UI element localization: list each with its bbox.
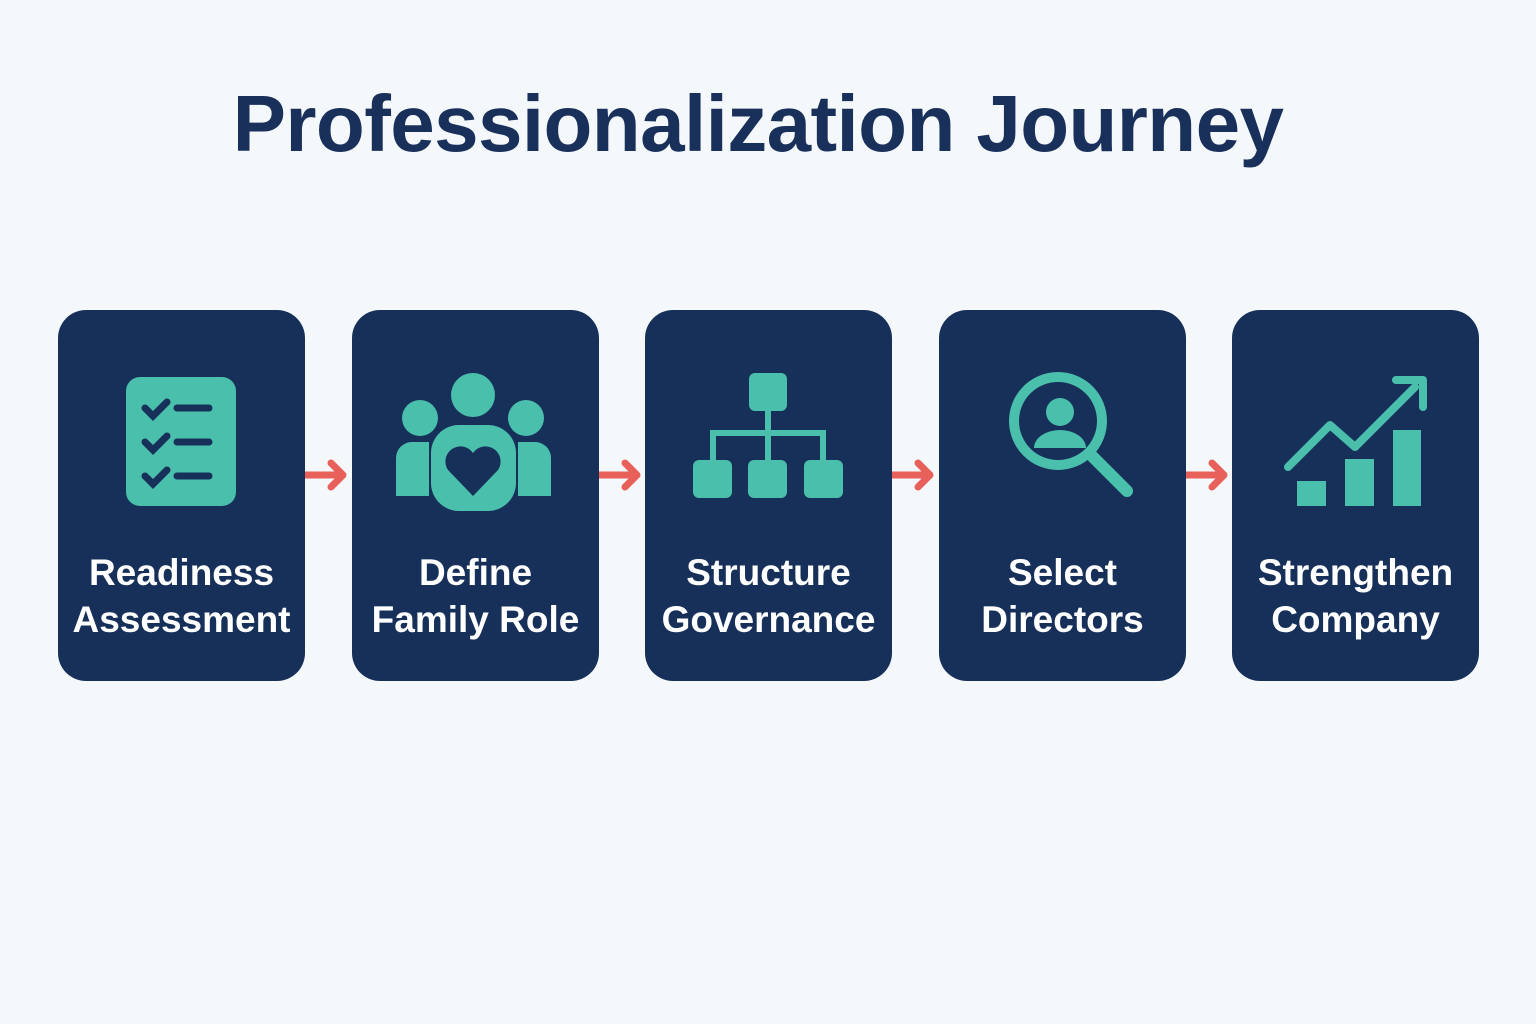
icon: growth chart xyxy=(1284,376,1427,506)
icon: magnifier with person xyxy=(1009,372,1133,497)
arrow 2 xyxy=(599,460,640,490)
label: Strengthen xyxy=(1258,552,1453,593)
label xyxy=(372,552,579,640)
title: Professionalization Journey xyxy=(233,79,1283,168)
label: Governance xyxy=(662,599,875,640)
card 1: Readiness Assessment xyxy=(58,310,305,681)
label: Structure xyxy=(686,552,851,593)
arrow 1 xyxy=(305,460,346,490)
card 4: Select Directors xyxy=(939,310,1186,681)
icon: family heart xyxy=(396,373,551,511)
label: Company xyxy=(1271,599,1440,640)
arrow 3 xyxy=(892,460,934,490)
card 5: Strengthen Company xyxy=(1232,310,1479,681)
label xyxy=(981,552,1144,640)
label: Readiness xyxy=(89,552,274,593)
card 2: Define Family Role xyxy=(352,310,599,681)
label xyxy=(72,552,290,640)
label: Assessment xyxy=(72,599,290,640)
label: Select xyxy=(1008,552,1117,593)
label xyxy=(1258,552,1453,640)
label xyxy=(662,552,875,640)
label: Define xyxy=(419,552,532,593)
label: Directors xyxy=(981,599,1144,640)
arrow 4 xyxy=(1186,460,1228,490)
card 3: Structure Governance xyxy=(645,310,892,681)
icon: org chart xyxy=(693,373,843,498)
label: Family Role xyxy=(372,599,579,640)
icon: checklist xyxy=(126,377,236,506)
